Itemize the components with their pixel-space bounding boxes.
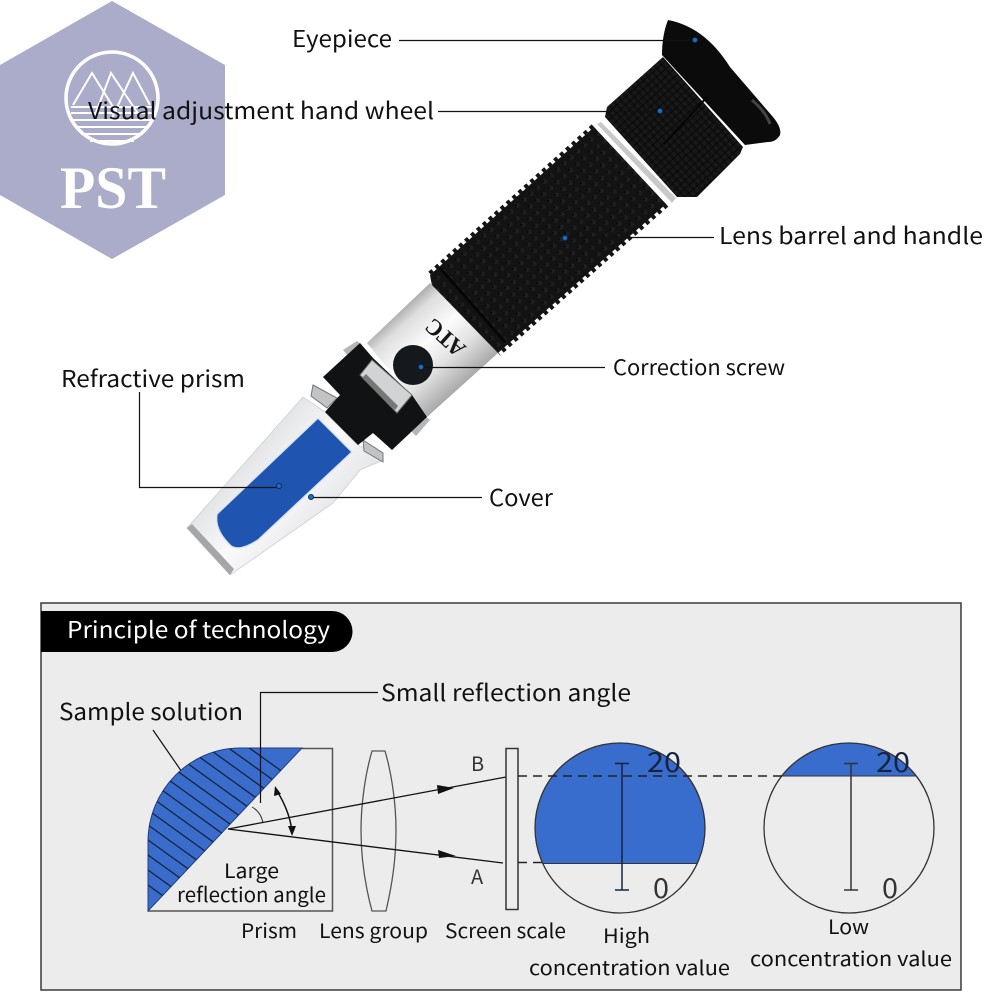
label: Large reflection angle: reflection angle xyxy=(177,879,326,908)
lens group xyxy=(361,751,396,911)
high concentration view: 0 xyxy=(653,867,669,906)
rubber handle xyxy=(430,127,666,353)
silver ring xyxy=(597,122,676,203)
label: Sample solution: Sample solution xyxy=(59,693,243,727)
eyepiece rubber cup xyxy=(662,20,780,145)
clip shadow xyxy=(362,374,398,410)
sample solution hatched blue xyxy=(148,748,303,912)
dashed reference lines xyxy=(518,776,782,862)
low concentration view: 0 xyxy=(882,867,898,906)
metal clip xyxy=(360,360,412,413)
light rays xyxy=(228,777,506,863)
low concentration view: 20 xyxy=(876,741,910,780)
label: Large reflection angle xyxy=(177,855,326,908)
small reflection angle arc xyxy=(252,807,263,823)
label: Correction screw xyxy=(418,352,785,382)
label: High concentration value: concentration value xyxy=(529,952,730,981)
blue prism window xyxy=(217,418,352,548)
panel: principle of technology xyxy=(41,603,961,1001)
label: Lens group: Lens group xyxy=(319,915,428,944)
label: Lens barrel and handle: Lens barrel and handle xyxy=(719,217,983,251)
label: Low concentration value xyxy=(750,911,952,972)
label: Sample solution xyxy=(59,693,243,788)
label: Eyepiece: Eyepiece xyxy=(292,20,392,54)
label: Screen scale: Screen scale xyxy=(445,915,566,944)
high concentration view xyxy=(535,741,705,913)
label: Eyepiece xyxy=(292,20,698,54)
label: Cover xyxy=(308,479,553,513)
highlight on cup xyxy=(752,100,770,124)
low concentration view xyxy=(764,741,934,913)
label: Large reflection angle: Large xyxy=(224,855,279,884)
refractometer device xyxy=(187,20,780,575)
silver barrel xyxy=(367,283,498,417)
prism outline xyxy=(148,748,332,911)
label: Correction screw: Correction screw xyxy=(613,352,785,382)
label: Lens barrel and handle xyxy=(562,217,983,251)
hinge pin upper left xyxy=(311,385,337,408)
hinge pin lower xyxy=(363,440,383,462)
panel heading: Principle of technology xyxy=(67,611,330,645)
prism diagram xyxy=(148,748,334,912)
label: Low concentration value: concentration value xyxy=(750,943,952,972)
screen scale xyxy=(506,748,518,910)
correction screw xyxy=(393,345,433,385)
black clamp xyxy=(323,343,427,450)
label: Refractive prism: Refractive prism xyxy=(61,360,245,394)
ATC engraving: ATC xyxy=(420,313,470,362)
glass tip xyxy=(187,524,234,575)
label: Refractive prism xyxy=(61,360,282,488)
logo: PST hexagon watermark xyxy=(0,1,225,259)
visual adjustment wheel xyxy=(605,57,743,197)
hinge pin top xyxy=(343,341,362,356)
label: Small reflection angle: Small reflection angle xyxy=(381,674,631,708)
hinge pin right xyxy=(411,416,430,436)
large reflection double arrow xyxy=(274,786,296,836)
logo: PST hexagon watermark: PST xyxy=(60,155,166,221)
handle end collar xyxy=(440,268,505,342)
label: High concentration value xyxy=(529,920,730,981)
panel heading xyxy=(41,611,352,652)
label: Low concentration value: Low xyxy=(828,911,869,940)
label: A: A xyxy=(471,861,484,890)
handle serrated edges xyxy=(430,127,666,353)
label: Visual adjustment hand wheel: Visual adjustment hand wheel xyxy=(88,92,434,126)
label: Cover: Cover xyxy=(489,479,553,513)
label: Small reflection angle xyxy=(260,674,631,803)
label: B: B xyxy=(471,748,484,777)
label: Prism: Prism xyxy=(241,915,297,944)
high concentration view: 20 xyxy=(647,741,681,780)
prism glass cover xyxy=(187,397,383,575)
label: Visual adjustment hand wheel xyxy=(88,92,662,126)
wheel groove xyxy=(664,97,707,144)
label: High concentration value: High xyxy=(603,920,650,949)
